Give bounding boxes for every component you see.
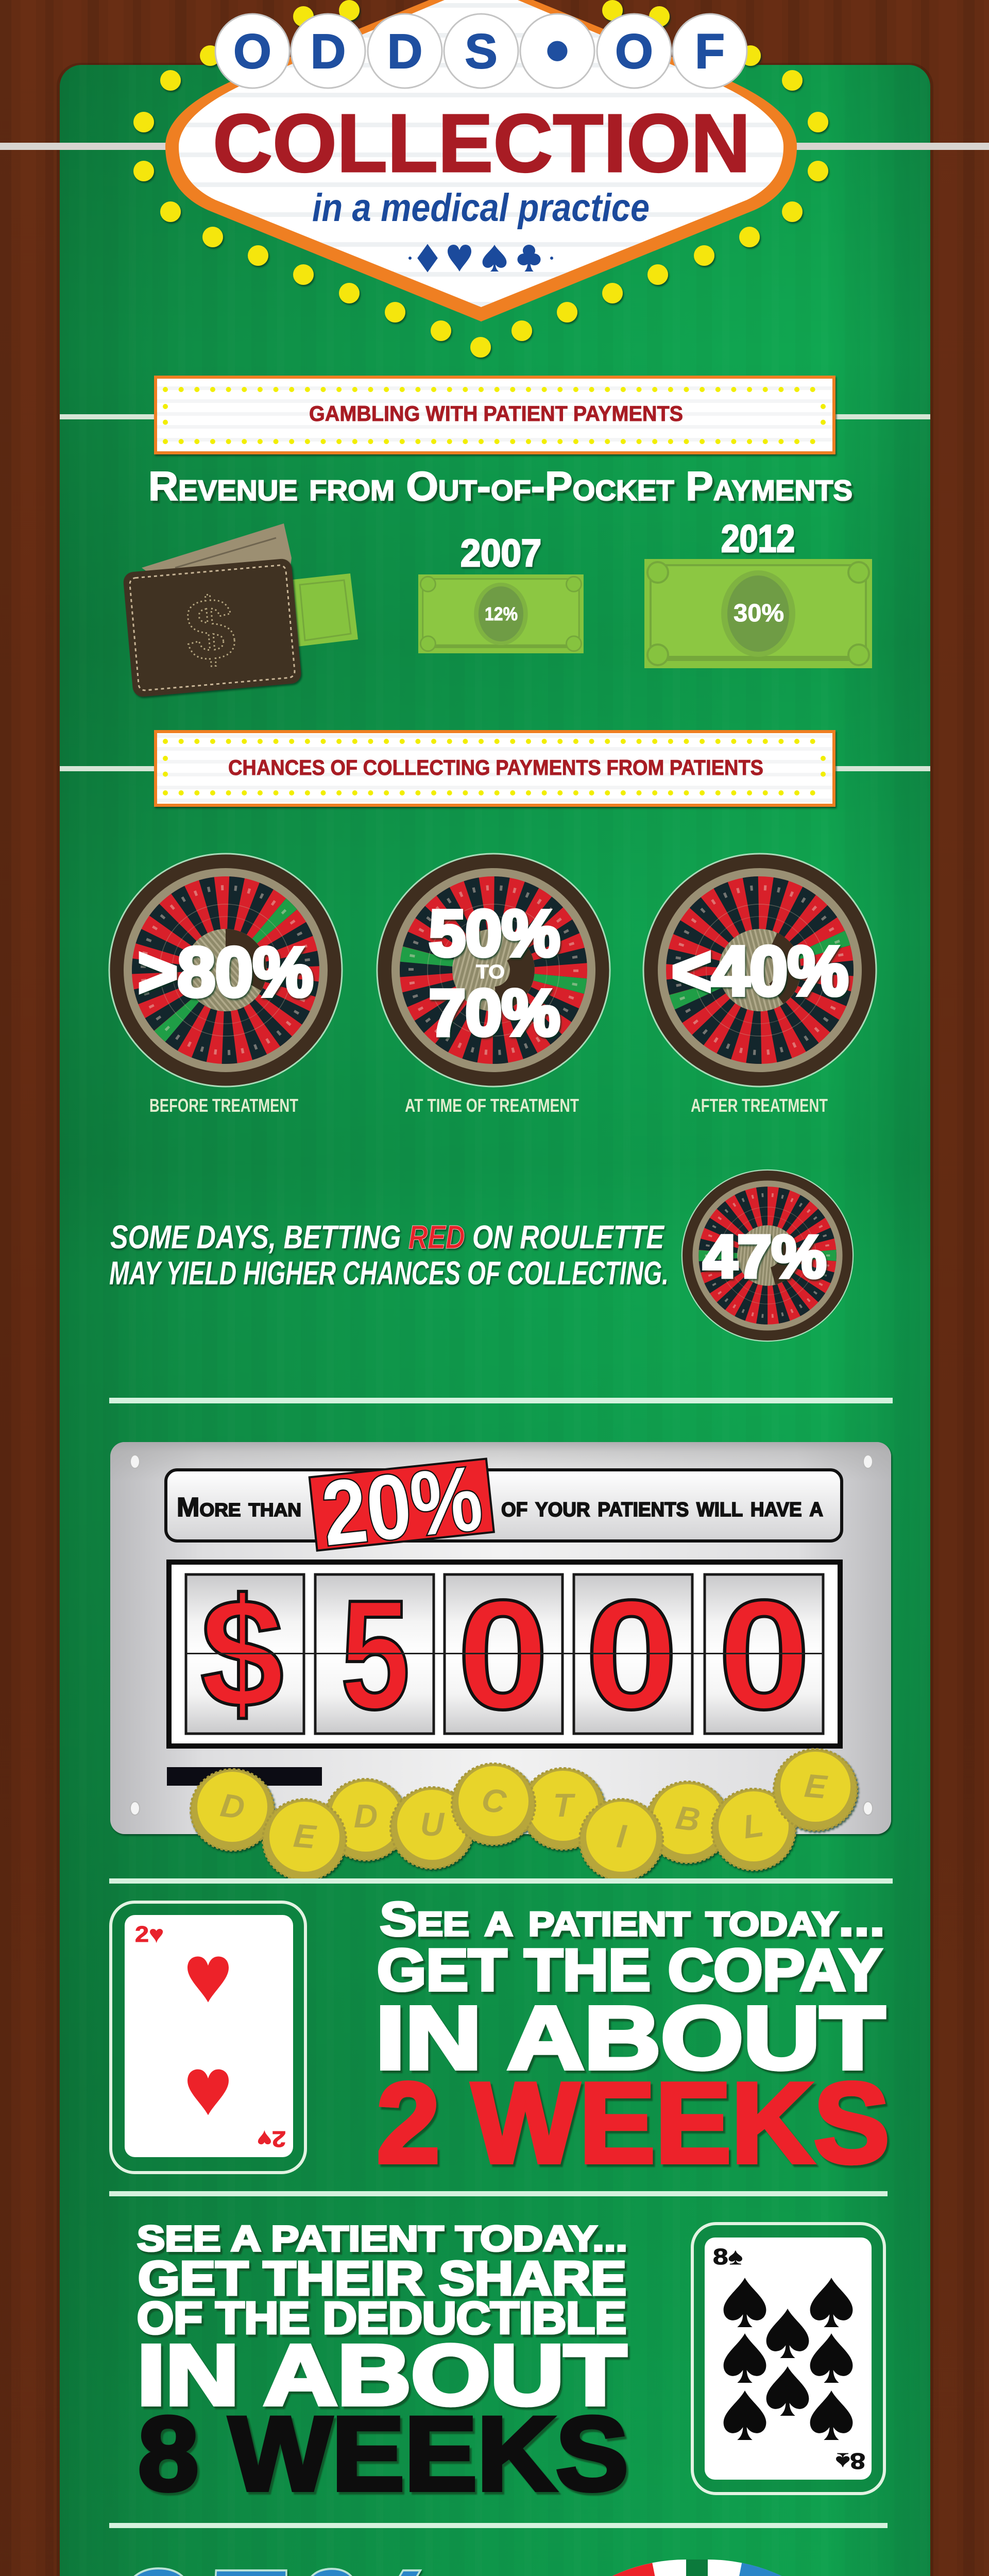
two of hearts card [111, 1902, 305, 2173]
text: deductible in about 8 weeks: IN ABOUT [137, 2328, 626, 2423]
coins spelling deductible: C [479, 1781, 509, 1821]
reel digits: 0 [585, 1568, 678, 1741]
coins spelling deductible: E [803, 1767, 829, 1806]
top rail line [0, 143, 989, 150]
eight of spades card: 8♠ [835, 2448, 865, 2473]
coins spelling deductible: D [218, 1786, 247, 1826]
text: deductible in about 8 weeks: 8 WEEKS [138, 2395, 628, 2513]
roulette wheel: after treatment [605, 816, 914, 1125]
roulette wheel: 47% [646, 1134, 889, 1377]
roulette wheel: at time of treatment: 50% [429, 897, 560, 970]
slot machine panel [110, 1442, 891, 1834]
reel frame [169, 1562, 840, 1746]
coins spelling deductible: D [354, 1798, 378, 1835]
icon: wallet with cash: $ [182, 579, 239, 681]
letter balls: ODDS · OF: D [387, 24, 422, 79]
coins spelling deductible: U [420, 1806, 445, 1843]
2012 bill: 30% [734, 600, 784, 627]
banner heading: GAMBLING WITH PATIENT PAYMENTS [309, 401, 683, 426]
coins spelling deductible: I [615, 1817, 628, 1855]
two of hearts card: 2♥ [257, 2126, 286, 2151]
screws [130, 1455, 873, 1815]
two of hearts card: 2♥ [135, 1922, 164, 1947]
heading: revenue from out-of-pocket payments: Revenue from Out-of-Pocket Payments [148, 463, 852, 509]
reel digits: 0 [457, 1568, 549, 1741]
subtitle: in a medical practice [312, 186, 650, 230]
card suit row [408, 244, 553, 272]
text: copay in about 2 weeks: IN ABOUT [376, 1988, 885, 2088]
coins spelling deductible: T [553, 1787, 575, 1824]
coins spelling deductible: E [292, 1817, 318, 1856]
text: copay in about 2 weeks: GET THE COPAY [377, 1938, 882, 2003]
label: AFTER TREATMENT [691, 1095, 828, 1116]
slot header label: More than [177, 1493, 301, 1522]
eight of spades card [692, 2224, 884, 2494]
text: deductible in about 8 weeks: GET THEIR SHARE [138, 2251, 626, 2305]
roulette wheel: before treatment: >80% [138, 933, 313, 1011]
coin slot [167, 1767, 322, 1786]
slot header label [166, 1470, 842, 1541]
roulette wheel: 47%: 47% [703, 1223, 826, 1290]
split casino chip pie chart [612, 2560, 782, 2576]
text: copay in about 2 weeks: See a patient today... [380, 1892, 885, 1946]
20% stamp: 20% [317, 1446, 487, 1565]
blue chip half [708, 2560, 782, 2576]
letter balls: ODDS · OF: O [615, 24, 653, 79]
coins spelling deductible [191, 1749, 857, 1880]
reel digits: $ [200, 1566, 284, 1740]
icon: wallet with cash [123, 523, 358, 698]
coins spelling deductible: L [741, 1806, 766, 1845]
2007 bill [418, 532, 584, 653]
sign white face [179, 0, 783, 307]
sign light bulbs [133, 0, 828, 358]
title sign [133, 0, 828, 358]
reel digits: 5 [340, 1568, 410, 1741]
text: betting red on roulette [109, 1218, 669, 1292]
sign orange outline [165, 0, 797, 321]
banner: gambling with patient payments [60, 377, 930, 453]
letter balls: ODDS · OF: O [233, 24, 271, 79]
roulette wheel: at time of treatment: 70% [429, 976, 560, 1049]
roulette wheel: after treatment: <40% [672, 932, 848, 1010]
letter balls: ODDS · OF [215, 12, 747, 88]
banner: chances of collecting [60, 732, 930, 805]
reel digits [200, 1566, 810, 1741]
roulette wheel: at time of treatment [331, 808, 656, 1132]
split gap [599, 2560, 708, 2576]
roulette wheel: at time of treatment: TO [476, 961, 505, 983]
label: AT TIME OF TREATMENT [405, 1095, 579, 1116]
chip shadow [540, 2566, 888, 2576]
eight of spades card: 8♠ [713, 2244, 743, 2269]
2007 bill: 12% [485, 603, 518, 624]
label: BEFORE TREATMENT [149, 1095, 298, 1116]
text: deductible in about 8 weeks [137, 2218, 628, 2513]
letter balls: ODDS · OF: F [695, 24, 725, 79]
roulette wheel: before treatment [109, 854, 342, 1116]
letter balls: ODDS · OF: • [545, 12, 569, 88]
text: betting red on roulette: SOME DAYS, BETTING RED ON ROULETTE [110, 1218, 665, 1256]
text: betting red on roulette: MAY YIELD HIGHER CHANCES OF COLLECTING. [109, 1255, 669, 1292]
text: copay in about 2 weeks [376, 1892, 890, 2187]
text: deductible in about 8 weeks: OF THE DEDUCTIBLE [137, 2293, 626, 2343]
banner heading: CHANCES OF COLLECTING PAYMENTS FROM PATIENTS [228, 755, 763, 779]
reel digits: 0 [718, 1568, 810, 1741]
red chip half [612, 2560, 686, 2576]
text: copay in about 2 weeks: 2 WEEKS [377, 2059, 890, 2187]
letter balls: ODDS · OF: D [311, 24, 346, 79]
2007 bill: 2007 [461, 532, 541, 574]
coins spelling deductible: B [674, 1799, 702, 1839]
2012 bill: 2012 [721, 517, 795, 560]
2012 bill [644, 517, 872, 668]
text: deductible in about 8 weeks: SEE A PATIENT TODAY... [137, 2218, 627, 2259]
title: COLLECTION: COLLECTION [213, 97, 751, 189]
slot header label: of your patients will have a [501, 1490, 823, 1522]
letter balls: ODDS · OF: S [465, 24, 498, 79]
